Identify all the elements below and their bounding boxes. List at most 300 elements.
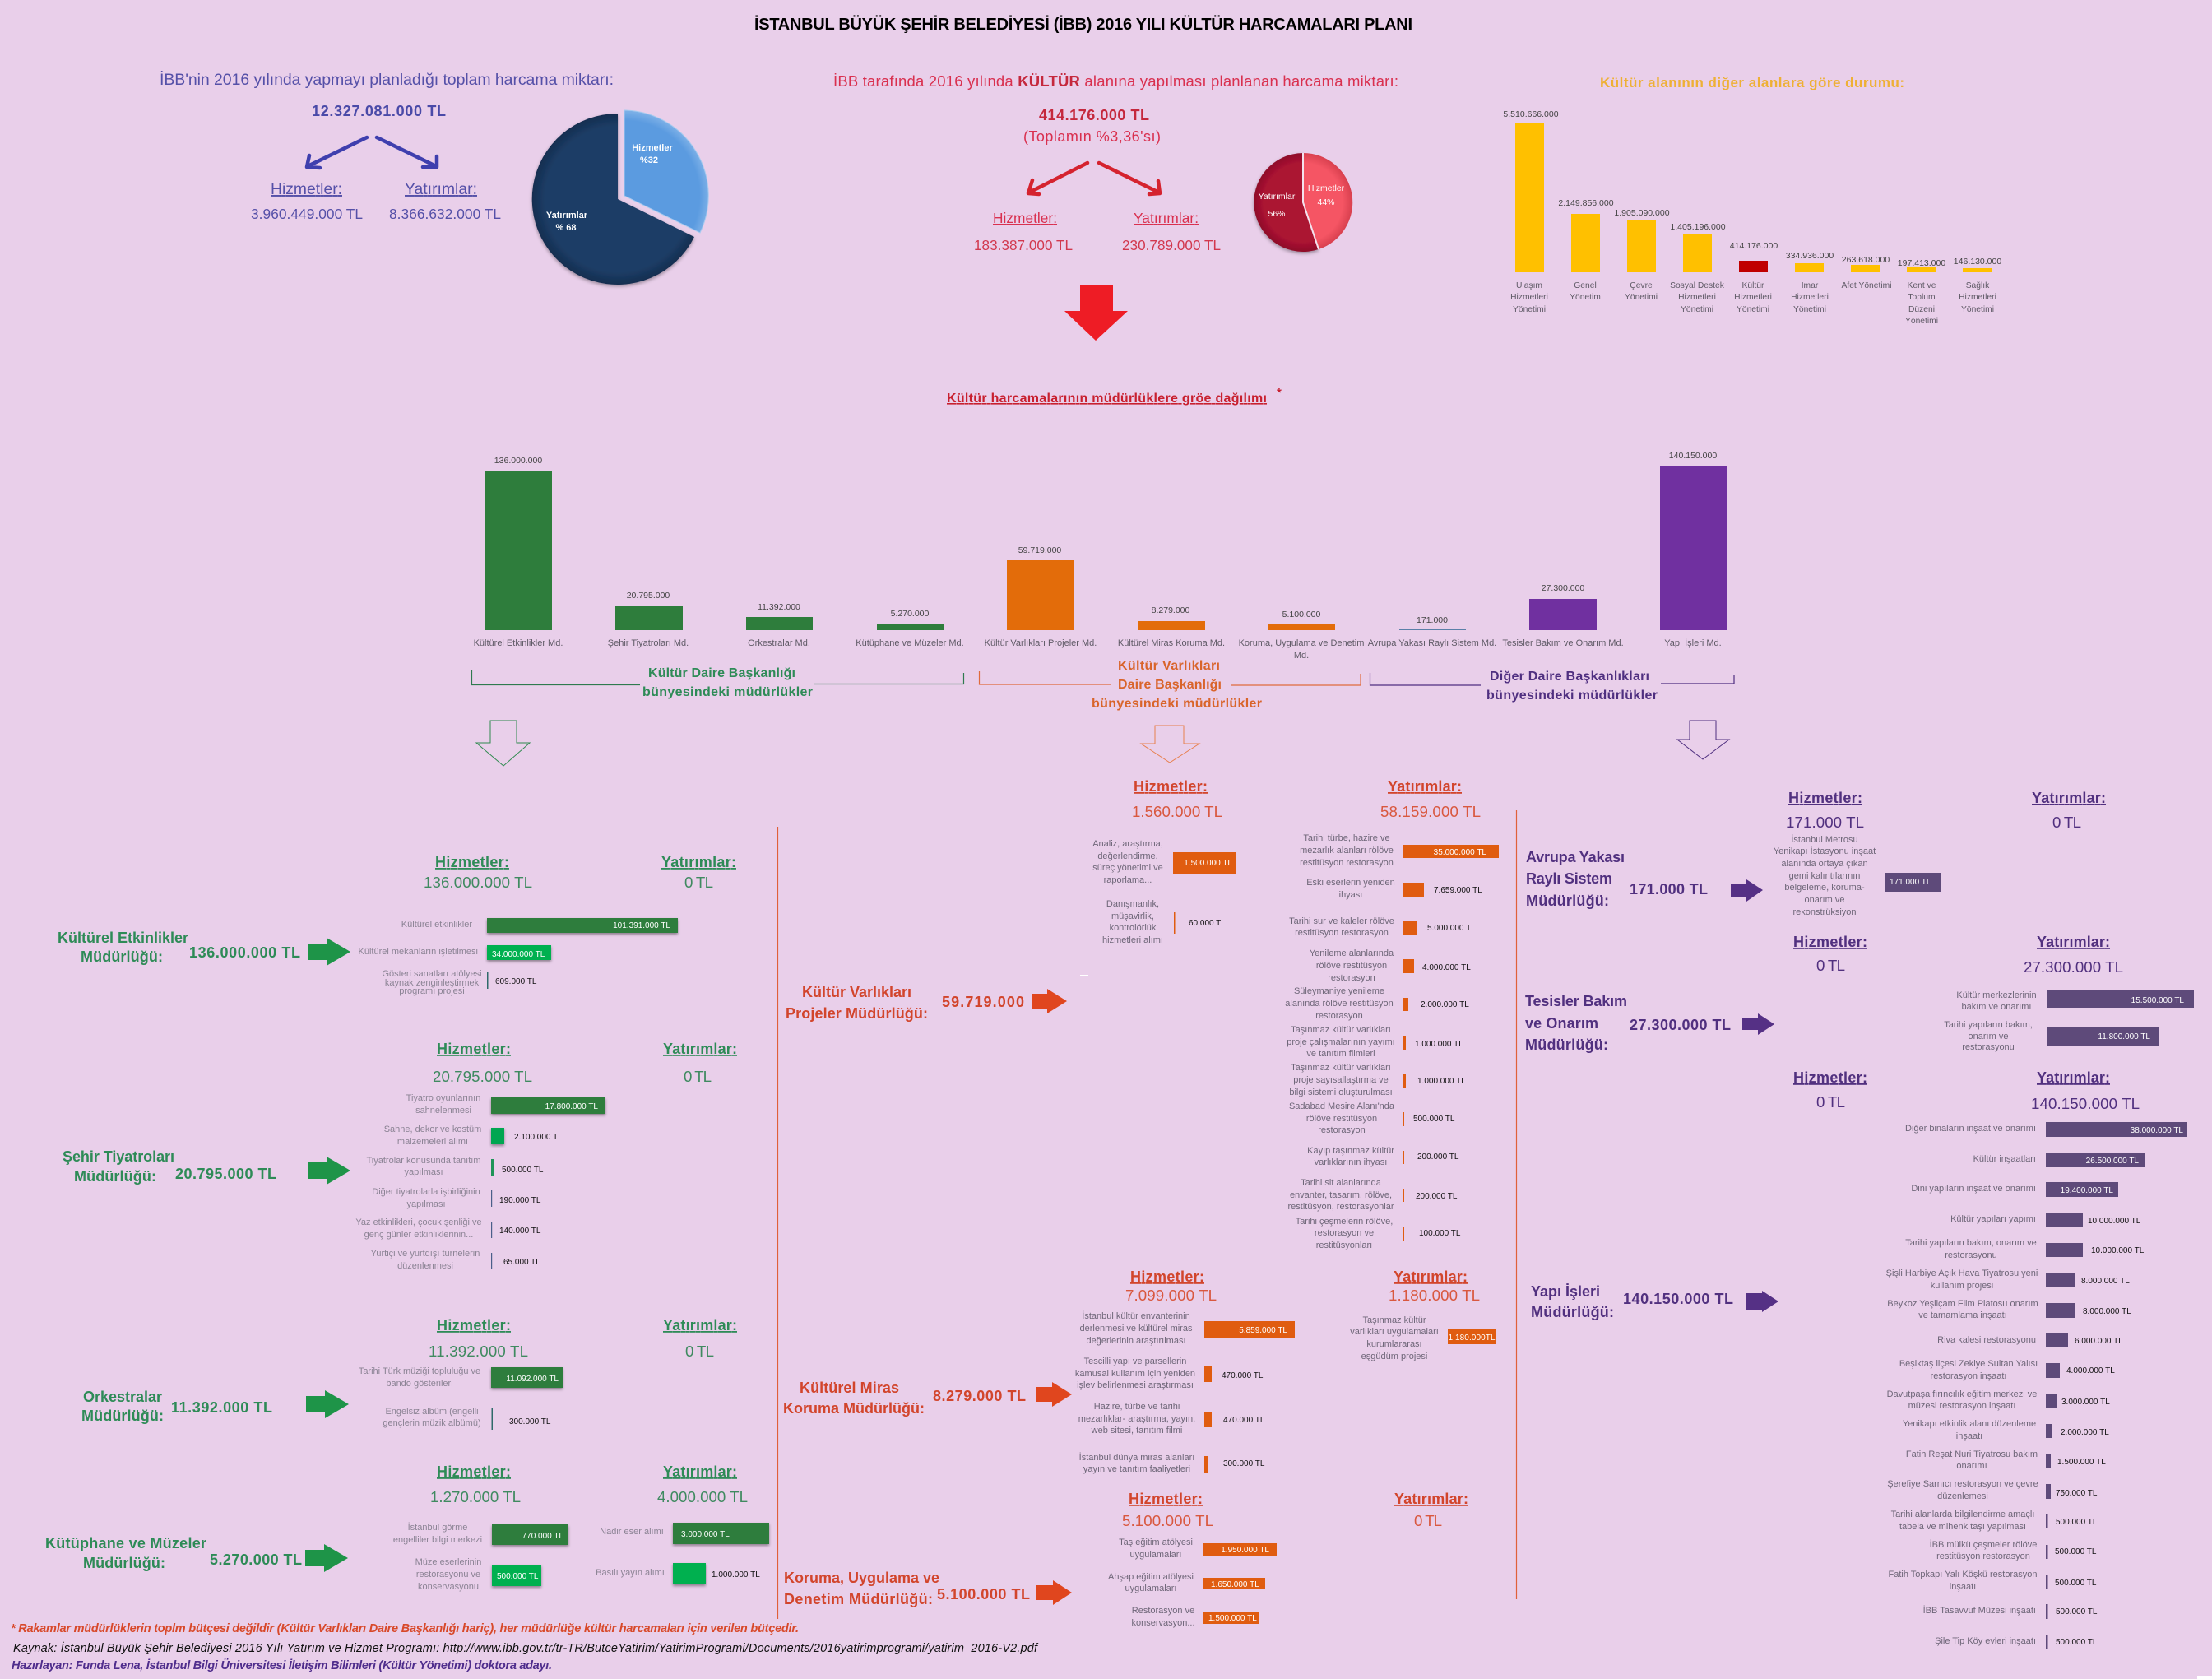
row: Yenikapı etkinlik alanı düzenleme bbox=[1903, 1419, 2036, 1429]
row: 38.000.000 TL bbox=[2131, 1126, 2183, 1135]
row: Taşınmaz kültür bbox=[1362, 1315, 1426, 1325]
bar chart: spending by area: Yönetimi bbox=[1681, 305, 1713, 314]
row bbox=[1956, 990, 2194, 1012]
investments amount: 230.789.000 TL bbox=[1122, 238, 1221, 253]
directorate total: 5.100.000 TL bbox=[937, 1586, 1030, 1602]
row: 200.000 TL bbox=[1417, 1153, 1459, 1162]
row: Nadir eser alımı bbox=[600, 1527, 664, 1537]
arrow bbox=[1742, 1013, 1774, 1035]
heading: distribution by directorate: Kültür harcamalarının müdürlüklere gröe dağılımı bbox=[947, 392, 1267, 406]
investments heading: Yatırımlar: bbox=[1394, 1491, 1468, 1507]
bar chart: directorates: Koruma, Uygulama ve Denetim bbox=[1239, 638, 1364, 648]
row: 500.000 TL bbox=[502, 1166, 544, 1175]
source: Kaynak: İstanbul Büyük Şehir Belediyesi 2016 Yılı Yatırım ve Hizmet Programı: http://www.ibb.gov.tr/tr-TR/ButceYatirim/YatirimProgrami/Documents/2016yatirimprogrami/yatirim_2016-V2.pdf bbox=[13, 1641, 1039, 1655]
row: düzenlemesi bbox=[1937, 1491, 1988, 1501]
row: 500.000 TL bbox=[2055, 1579, 2097, 1588]
bar chart: spending by area: Yönetimi bbox=[1961, 305, 1994, 314]
bar chart: spending by area: Hizmetleri bbox=[1734, 293, 1772, 302]
services label: Hizmetler: bbox=[271, 181, 342, 198]
bar chart: directorates bbox=[474, 451, 1727, 661]
row bbox=[1289, 1102, 1455, 1135]
row: proje çalışmalarının yayımı bbox=[1287, 1037, 1395, 1047]
services total: 0 TL bbox=[1816, 957, 1845, 974]
row: 6.000.000 TL bbox=[2075, 1337, 2123, 1346]
row: Tiyatro oyunlarının bbox=[406, 1093, 480, 1103]
bar chart: spending by area: 334.936.000 bbox=[1786, 251, 1834, 261]
services total: 136.000.000 TL bbox=[424, 874, 532, 891]
row: 1.950.000 TL bbox=[1221, 1546, 1269, 1555]
row: 500.000 TL bbox=[2056, 1607, 2098, 1616]
bracket: culture department: Kültür Daire Başkanlığı bbox=[648, 666, 795, 680]
row: restorasyonu bbox=[1945, 1250, 1997, 1260]
pie chart: total spending: %32 bbox=[640, 155, 658, 165]
row: 300.000 TL bbox=[509, 1417, 551, 1426]
services heading: Hizmetler: bbox=[437, 1317, 511, 1333]
row: Yenikapı İstasyonu inşaat bbox=[1774, 846, 1876, 856]
row: 8.000.000 TL bbox=[2083, 1307, 2131, 1316]
directorate name: Denetim Müdürlüğü: bbox=[784, 1591, 933, 1607]
directorate total: 8.279.000 TL bbox=[933, 1388, 1026, 1404]
row: 470.000 TL bbox=[1223, 1416, 1265, 1425]
directorate name: Müdürlüğü: bbox=[83, 1555, 165, 1571]
row: 5.000.000 TL bbox=[1427, 924, 1476, 933]
pie chart: culture spending bbox=[1254, 153, 1352, 252]
row: restorasyon ve bbox=[1315, 1228, 1374, 1238]
row: 2.100.000 TL bbox=[514, 1133, 563, 1142]
row: raporlama... bbox=[1104, 875, 1152, 885]
panel: Şehir Tiyatroları bbox=[63, 1041, 737, 1271]
row bbox=[1905, 1122, 2187, 1137]
investments total: 140.150.000 TL bbox=[2031, 1095, 2140, 1112]
row bbox=[384, 1125, 563, 1147]
bar chart: spending by area: Hizmetleri bbox=[1959, 293, 1996, 302]
bar chart: spending by area: 263.618.000 bbox=[1842, 255, 1890, 265]
row bbox=[1905, 1238, 2145, 1260]
row bbox=[1131, 1606, 1259, 1628]
row: 19.400.000 TL bbox=[2061, 1186, 2113, 1195]
panel: Avrupa Yakası Raylı Sistem bbox=[1526, 790, 2106, 917]
row bbox=[596, 1563, 760, 1584]
arrow: hollow orange bbox=[1141, 726, 1199, 763]
row bbox=[1102, 899, 1226, 945]
bar chart: spending by area: Afet Yönetimi bbox=[1841, 281, 1892, 290]
bar chart: spending by area: Kültür bbox=[1742, 281, 1764, 290]
row: kullanım projesi bbox=[1931, 1281, 1993, 1291]
bracket: other departments: Diğer Daire Başkanlıkları bbox=[1490, 670, 1649, 684]
directorate total: 59.719.000 bbox=[942, 994, 1024, 1010]
heading: distribution by directorate bbox=[947, 386, 1282, 406]
directorate name: Müdürlüğü: bbox=[1525, 1037, 1608, 1053]
bar chart: spending by area: Çevre bbox=[1630, 281, 1653, 290]
row: Taşınmaz kültür varlıkları bbox=[1291, 1063, 1391, 1073]
row bbox=[1300, 833, 1499, 868]
row bbox=[1119, 1538, 1277, 1560]
bar chart: directorates: Orkestralar Md. bbox=[748, 638, 810, 648]
row: restitüsyon restorasyon bbox=[1936, 1551, 2030, 1561]
row: 500.000 TL bbox=[1413, 1115, 1455, 1124]
services amount: 183.387.000 TL bbox=[974, 238, 1073, 253]
row: Tiyatrolar konusunda tanıtım bbox=[367, 1156, 480, 1166]
services heading: Hizmetler: bbox=[1788, 790, 1862, 806]
row: Yaz etkinlikleri, çocuk şenliği ve bbox=[355, 1218, 482, 1227]
arrow bbox=[1746, 1291, 1778, 1312]
directorate name: Şehir Tiyatroları bbox=[63, 1148, 174, 1165]
row: kontrolörlük bbox=[1110, 923, 1157, 933]
row bbox=[406, 1093, 605, 1115]
row: müzesi restorasyon inşaatı bbox=[1908, 1401, 2015, 1411]
investments total: 0 TL bbox=[2052, 814, 2081, 831]
bracket: cultural assets department bbox=[979, 659, 1361, 711]
row bbox=[359, 945, 551, 960]
row: 750.000 TL bbox=[2056, 1489, 2098, 1498]
row: alanında ortaya çıkan bbox=[1781, 859, 1868, 869]
title: İSTANBUL BÜYÜK ŞEHİR BELEDİYESİ (İBB) 2016 YILI KÜLTÜR HARCAMALARI PLANI bbox=[754, 15, 1412, 34]
row: Kültür inşaatları bbox=[1973, 1154, 2036, 1164]
row bbox=[1906, 1449, 2106, 1471]
arrow: hollow purple bbox=[1677, 721, 1729, 759]
directorate total: 140.150.000 TL bbox=[1623, 1291, 1733, 1307]
investments heading: Yatırımlar: bbox=[2037, 1069, 2110, 1086]
services heading: Hizmetler: bbox=[437, 1463, 511, 1480]
bar chart: directorates: 5.100.000 bbox=[1282, 610, 1321, 619]
row: Tarihi yapıların bakım, bbox=[1944, 1020, 2033, 1030]
panel: Kütüphane ve Müzeler bbox=[45, 1463, 769, 1592]
bar chart: directorates: 171.000 bbox=[1417, 615, 1448, 625]
row bbox=[1903, 1419, 2109, 1441]
row: Basılı yayın alımı bbox=[596, 1568, 665, 1578]
bar chart: directorates: Kütüphane ve Müzeler Md. bbox=[856, 638, 964, 648]
row bbox=[1930, 1539, 2097, 1561]
row: envanter, tasarım, rölöve, bbox=[1290, 1190, 1392, 1200]
row bbox=[1296, 1217, 1461, 1250]
row: 7.659.000 TL bbox=[1434, 886, 1482, 895]
services heading: Hizmetler: bbox=[1134, 778, 1208, 795]
directorate name: Projeler Müdürlüğü: bbox=[786, 1005, 928, 1022]
heading: comparison: Kültür alanının diğer alanlara göre durumu: bbox=[1600, 75, 1904, 90]
row: restitüsyon restorasyon bbox=[1295, 928, 1389, 938]
row: restorasyonu ve bbox=[416, 1570, 480, 1579]
row: engelliler bilgi merkezi bbox=[393, 1535, 482, 1545]
row: varlıklarının ihyası bbox=[1315, 1157, 1387, 1167]
row: 4.000.000 TL bbox=[1422, 963, 1471, 972]
directorate name: Yapı İşleri bbox=[1531, 1283, 1600, 1300]
row bbox=[1774, 834, 1941, 917]
row: Diğer binaların inşaat ve onarımı bbox=[1905, 1124, 2036, 1134]
row: Diğer tiyatrolarla işbirliğinin bbox=[372, 1187, 480, 1197]
row: 3.000.000 TL bbox=[681, 1530, 730, 1539]
row: 101.391.000 TL bbox=[613, 921, 670, 930]
directorate name: ve Onarım bbox=[1525, 1015, 1598, 1032]
row bbox=[1080, 1310, 1295, 1346]
row: 11.800.000 TL bbox=[2098, 1032, 2150, 1041]
row bbox=[1310, 948, 1471, 983]
row bbox=[1079, 1452, 1265, 1474]
panel: Tesisler Bakım ve Onarım bbox=[1525, 934, 2194, 1053]
footnote: * Rakamlar müdürlüklerin toplm bütçesi değildir (Kültür Varlıkları Daire Başkanlığı hariç), her müdürlüğe kültür harcamaları için verilen bütçedir. bbox=[11, 1622, 799, 1635]
row: rekonstrüksiyon bbox=[1792, 907, 1857, 917]
pie chart: total spending: Yatırımlar bbox=[546, 211, 588, 220]
row: 10.000.000 TL bbox=[2088, 1217, 2141, 1226]
row: 1.500.000 TL bbox=[1208, 1614, 1257, 1623]
directorate total: 11.392.000 TL bbox=[171, 1399, 272, 1416]
arrow bbox=[306, 1390, 349, 1418]
row: 35.000.000 TL bbox=[1434, 848, 1486, 857]
bar chart: spending by area: 146.130.000 bbox=[1954, 257, 2001, 267]
row: Ahşap eğitim atölyesi bbox=[1108, 1572, 1194, 1582]
bar chart: spending by area: Hizmetleri bbox=[1510, 293, 1548, 302]
bar chart: directorates: Kültürel Etkinlikler Md. bbox=[474, 638, 563, 648]
row: uygulamaları bbox=[1125, 1584, 1176, 1593]
investments heading: Yatırımlar: bbox=[1394, 1269, 1468, 1285]
row: Tarihi çeşmelerin rölöve, bbox=[1296, 1217, 1393, 1227]
directorate name: Müdürlüğü: bbox=[81, 948, 163, 965]
investments heading: Yatırımlar: bbox=[2037, 934, 2110, 950]
directorate name: Tesisler Bakım bbox=[1525, 993, 1627, 1009]
investments heading: Yatırımlar: bbox=[663, 1463, 737, 1480]
services total: 11.392.000 TL bbox=[429, 1343, 528, 1360]
directorate name: Müdürlüğü: bbox=[1526, 893, 1609, 909]
row: kurumlararası bbox=[1366, 1339, 1422, 1349]
services heading: Hizmetler: bbox=[1793, 1069, 1867, 1086]
culture amount: 414.176.000 TL bbox=[1039, 107, 1149, 123]
row: 300.000 TL bbox=[1223, 1459, 1265, 1468]
bracket: culture department bbox=[472, 666, 964, 699]
row: 60.000 TL bbox=[1189, 919, 1226, 928]
row: mezarlıklar- araştırma, yayın, bbox=[1078, 1414, 1195, 1424]
row: onarımı bbox=[1956, 1461, 1987, 1471]
row bbox=[1289, 1063, 1466, 1097]
investments total: 0 TL bbox=[685, 1343, 714, 1360]
arrow: red down bbox=[1064, 285, 1128, 341]
row bbox=[1307, 1146, 1459, 1167]
row: 1.000.000 TL bbox=[712, 1570, 760, 1579]
row bbox=[371, 1249, 540, 1271]
row: Süleymaniye yenileme bbox=[1294, 986, 1384, 996]
row: 10.000.000 TL bbox=[2091, 1246, 2145, 1255]
row: Dini yapıların inşaat ve onarımı bbox=[1911, 1184, 2036, 1194]
row: 2.000.000 TL bbox=[1421, 1000, 1469, 1009]
row: rölöve restitüsyon bbox=[1316, 961, 1387, 971]
row: Kültürel etkinlikler bbox=[401, 920, 472, 930]
bar chart: directorates: Şehir Tiyatroları Md. bbox=[608, 638, 689, 648]
row: Beykoz Yeşilçam Film Platosu onarım bbox=[1887, 1299, 2038, 1309]
bar chart: spending by area: Sosyal Destek bbox=[1670, 281, 1725, 290]
row: Şerefiye Sarnıcı restorasyon ve çevre bbox=[1887, 1479, 2038, 1489]
row: Fatih Reşat Nuri Tiyatrosu bakım bbox=[1906, 1449, 2038, 1459]
row bbox=[1935, 1635, 2098, 1649]
directorate total: 20.795.000 TL bbox=[175, 1166, 276, 1182]
row bbox=[1889, 1570, 2097, 1592]
bar chart: directorates: 20.795.000 bbox=[627, 591, 670, 601]
bar chart: directorates: 140.150.000 bbox=[1669, 451, 1717, 461]
services total: 5.100.000 TL bbox=[1122, 1512, 1213, 1529]
arrow bbox=[1731, 879, 1763, 902]
row: 2.000.000 TL bbox=[2061, 1428, 2109, 1437]
row: Yurtiçi ve yurtdışı turnelerin bbox=[371, 1249, 480, 1259]
row: süreç yönetimi ve bbox=[1092, 863, 1163, 873]
investments heading: Yatırımlar: bbox=[661, 854, 736, 870]
row: 500.000 TL bbox=[2056, 1518, 2098, 1527]
row bbox=[383, 1407, 551, 1430]
row bbox=[1306, 878, 1482, 900]
directorate name: Kütüphane ve Müzeler bbox=[45, 1535, 206, 1551]
row: onarım ve bbox=[1969, 1032, 2008, 1041]
row: programı projesi bbox=[399, 986, 465, 996]
pie chart: culture spending: Yatırımlar bbox=[1259, 192, 1296, 202]
panel: total spending bbox=[160, 70, 708, 285]
pie chart: total spending bbox=[532, 110, 708, 285]
row bbox=[1950, 1213, 2141, 1227]
row: malzemeleri alımı bbox=[397, 1137, 468, 1147]
row: Tarihi yapıların bakım, onarım ve bbox=[1905, 1238, 2037, 1248]
row: Danışmanlık, bbox=[1106, 899, 1159, 909]
row: Kültürel mekanların işletilmesi bbox=[359, 947, 478, 957]
row bbox=[600, 1523, 769, 1544]
arrow bbox=[305, 1544, 348, 1572]
bar chart: spending by area: İmar bbox=[1802, 280, 1819, 290]
row: 1.500.000 TL bbox=[1184, 859, 1232, 868]
row: İstanbul Metrosu bbox=[1791, 834, 1858, 845]
directorate name: Kültürel Miras bbox=[800, 1380, 899, 1396]
row bbox=[1899, 1359, 2115, 1381]
bracket: other departments: bünyesindeki müdürlükler bbox=[1486, 689, 1658, 703]
heading: culture spending: İBB tarafında 2016 yılında KÜLTÜR alanına yapılması planlanan harcama miktarı: bbox=[833, 72, 1398, 90]
bracket: cultural assets department: bünyesindeki müdürlükler bbox=[1092, 697, 1262, 711]
services total: 20.795.000 TL bbox=[433, 1068, 532, 1085]
share of total: (Toplamın %3,36'sı) bbox=[1023, 128, 1161, 145]
row: restorasyonu bbox=[1962, 1042, 2015, 1052]
row bbox=[355, 1218, 541, 1240]
row: yapılması bbox=[406, 1199, 446, 1209]
investments label: Yatırımlar: bbox=[1134, 210, 1199, 226]
row bbox=[367, 1156, 544, 1177]
row: sahnelenmesi bbox=[415, 1106, 471, 1115]
bar chart: spending by area: 197.413.000 bbox=[1898, 258, 1945, 268]
row: onarım ve bbox=[1805, 895, 1844, 905]
services label: Hizmetler: bbox=[993, 210, 1057, 226]
bar chart: directorates: 136.000.000 bbox=[494, 456, 542, 466]
directorate name: Koruma, Uygulama ve bbox=[784, 1570, 939, 1586]
row: alanında rölöve restitüsyon bbox=[1285, 999, 1394, 1009]
row: İstanbul dünya miras alanları bbox=[1079, 1452, 1194, 1463]
row: Sadabad Mesire Alanı'nda bbox=[1289, 1102, 1395, 1111]
row bbox=[1078, 1402, 1265, 1435]
row bbox=[1886, 1269, 2130, 1291]
row: yapılması bbox=[404, 1167, 443, 1177]
panel: Koruma, Uygulama ve Denetim bbox=[784, 1491, 1468, 1628]
investments heading: Yatırımlar: bbox=[1388, 778, 1462, 795]
row bbox=[1108, 1572, 1265, 1593]
arrow bbox=[308, 1157, 350, 1185]
row: Gösteri sanatları atölyesi bbox=[382, 969, 482, 979]
bar chart: directorates: Avrupa Yakası Raylı Sistem Md. bbox=[1368, 638, 1496, 648]
row bbox=[415, 1557, 541, 1592]
arrows: culture split bbox=[1028, 163, 1160, 194]
row: İBB Tasavvuf Müzesi inşaatı bbox=[1923, 1605, 2036, 1616]
services total: 1.560.000 TL bbox=[1132, 803, 1222, 820]
row: değerlendirme, bbox=[1097, 851, 1158, 861]
row: İstanbul kültür envanterinin bbox=[1082, 1310, 1190, 1321]
row: İstanbul görme bbox=[408, 1522, 467, 1533]
row: Engelsiz albüm (engelli bbox=[385, 1407, 479, 1417]
row: eşgüdüm projesi bbox=[1361, 1352, 1427, 1361]
panel: culture spending bbox=[833, 72, 1398, 341]
row: Tarihi türbe, hazire ve bbox=[1303, 833, 1390, 843]
row: Hazire, türbe ve tarihi bbox=[1094, 1402, 1180, 1412]
row: Yenileme alanlarında bbox=[1310, 948, 1394, 958]
row: 1.650.000 TL bbox=[1211, 1580, 1259, 1589]
row: 500.000 TL bbox=[2056, 1638, 2098, 1647]
bar chart: spending by area bbox=[1503, 109, 2001, 326]
row: 200.000 TL bbox=[1416, 1192, 1458, 1201]
row: konservasyonu bbox=[418, 1582, 479, 1592]
row bbox=[382, 969, 537, 996]
row bbox=[1891, 1510, 2098, 1532]
row: Sahne, dekor ve kostüm bbox=[384, 1125, 481, 1134]
directorate total: 5.270.000 TL bbox=[210, 1551, 302, 1568]
directorate total: 171.000 TL bbox=[1630, 881, 1708, 897]
row bbox=[1288, 1178, 1458, 1212]
services total: 171.000 TL bbox=[1786, 814, 1864, 831]
row: rölöve restitüsyon bbox=[1306, 1114, 1377, 1124]
row: 1.000.000 TL bbox=[1417, 1077, 1466, 1086]
bar chart: directorates: 27.300.000 bbox=[1542, 583, 1584, 593]
row: mezarlık alanları rölöve bbox=[1300, 846, 1394, 856]
row: restitüsyon, restorasyonlar bbox=[1288, 1202, 1394, 1212]
row: restitüsyonları bbox=[1316, 1241, 1372, 1250]
row: 500.000 TL bbox=[2055, 1547, 2097, 1556]
bar chart: spending by area: Yönetimi bbox=[1793, 305, 1826, 314]
investments total: 0 TL bbox=[684, 874, 713, 891]
pie chart: total spending: Hizmetler bbox=[632, 143, 673, 153]
row: Fatih Topkapı Yalı Köşkü restorasyon bbox=[1889, 1570, 2037, 1579]
bar chart: spending by area: Toplum bbox=[1908, 293, 1936, 302]
row: 1.180.000TL bbox=[1448, 1333, 1496, 1343]
row: restorasyon bbox=[1328, 973, 1375, 983]
row: hizmetleri alımı bbox=[1102, 935, 1163, 945]
pie chart: culture spending: 56% bbox=[1268, 209, 1286, 219]
investments heading: Yatırımlar: bbox=[663, 1317, 737, 1333]
bracket: culture department: bünyesindeki müdürlükler bbox=[642, 685, 813, 699]
row: Şişli Harbiye Açık Hava Tiyatrosu yeni bbox=[1886, 1269, 2038, 1278]
row bbox=[1289, 916, 1476, 938]
row: Restorasyon ve bbox=[1132, 1606, 1194, 1616]
bar chart: directorates: 5.270.000 bbox=[891, 609, 930, 619]
bar chart: spending by area: Genel bbox=[1574, 281, 1597, 290]
bar chart: spending by area: Yönetim bbox=[1570, 293, 1601, 302]
row: müşavirlik, bbox=[1111, 911, 1154, 921]
bracket: cultural assets department: Kültür Varlıkları bbox=[1118, 659, 1220, 673]
row: uygulamaları bbox=[1130, 1550, 1181, 1560]
panel: Kültürel Etkinlikler bbox=[58, 854, 736, 996]
bar chart: spending by area: Yönetimi bbox=[1513, 305, 1546, 314]
row: inşaatı bbox=[1950, 1582, 1976, 1592]
bar chart: spending by area: Yönetimi bbox=[1625, 293, 1658, 302]
row: 100.000 TL bbox=[1419, 1229, 1461, 1238]
row bbox=[1887, 1389, 2110, 1411]
directorate name: Müdürlüğü: bbox=[81, 1408, 164, 1424]
row: düzenlenmesi bbox=[397, 1261, 453, 1271]
row: 15.500.000 TL bbox=[2131, 996, 2184, 1005]
row: bando gösterileri bbox=[386, 1379, 453, 1389]
row: 3.000.000 TL bbox=[2061, 1398, 2110, 1407]
panel: culture vs other areas bbox=[1503, 75, 2001, 326]
investments heading: Yatırımlar: bbox=[663, 1041, 737, 1057]
panel: Kültürel Miras Koruma bbox=[783, 1269, 1496, 1474]
row bbox=[359, 1366, 563, 1389]
investments total: 1.180.000 TL bbox=[1389, 1287, 1480, 1304]
arrow: hollow green bbox=[476, 721, 530, 766]
